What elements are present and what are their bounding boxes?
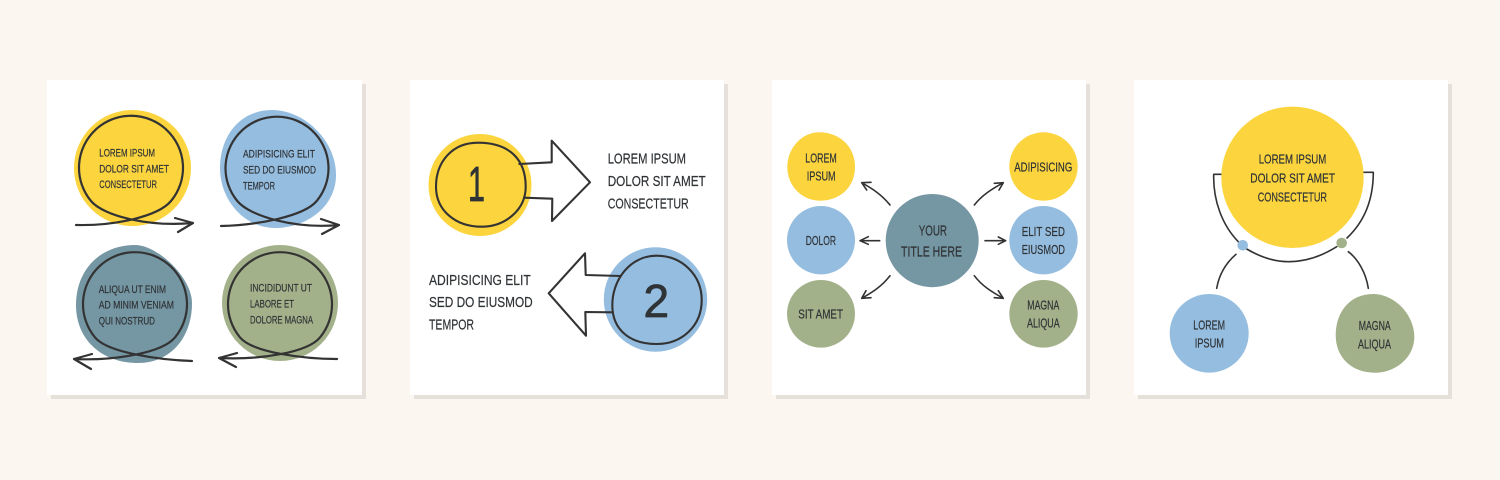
text: step 2: TEMPOR (429, 317, 474, 333)
step: blue loop: ADIPISICING ELIT (243, 148, 315, 160)
node: dolor: DOLOR (806, 234, 836, 248)
text: step 1: LOREM IPSUM (608, 151, 686, 167)
text: step 2 (429, 273, 533, 333)
step: yellow loop: LOREM IPSUM (99, 148, 155, 160)
arrow: lower right (974, 276, 1003, 298)
node: sit amet: SIT AMET (798, 308, 843, 322)
node: lorem ipsum (787, 132, 855, 201)
node: blue lorem ipsum (1170, 294, 1249, 373)
center node: YOUR (919, 224, 947, 240)
step: yellow loop (74, 110, 193, 232)
panel: hierarchy (1134, 80, 1452, 399)
node: lorem ipsum: LOREM (805, 151, 837, 165)
step: yellow loop: CONSECTETUR (99, 179, 157, 191)
connector left (1217, 254, 1236, 288)
main yellow circle: LOREM IPSUM (1259, 152, 1326, 166)
step: teal loop: QUI NOSTRUD (99, 315, 155, 327)
step 1: yellow circle with arrow: 1 (468, 158, 485, 212)
arrow: left (860, 237, 880, 244)
text: step 2: SED DO EIUSMOD (429, 295, 533, 311)
arrow: upper left (862, 182, 890, 205)
node: green magna aliqua (1336, 294, 1414, 373)
node: elit sed eiusmod: ELIT SED (1022, 225, 1065, 239)
panel: four looped arrows (47, 80, 366, 399)
step 2: blue circle with arrow (549, 247, 707, 352)
node: magna aliqua (1009, 280, 1078, 348)
main yellow circle: DOLOR SIT AMET (1250, 171, 1335, 185)
node: elit sed eiusmod (1009, 206, 1078, 274)
step 1: yellow circle with arrow (428, 134, 590, 236)
panel: numbered arrows (410, 80, 728, 399)
center node: TITLE HERE (901, 245, 962, 261)
arc bracket with dots (1214, 172, 1373, 262)
node: magna aliqua: MAGNA (1027, 299, 1060, 313)
panel: mind map (772, 80, 1090, 399)
step: teal loop: AD MINIM VENIAM (99, 299, 174, 311)
step: green loop (219, 245, 338, 367)
step: yellow loop: DOLOR SIT AMET (99, 163, 169, 175)
node: blue lorem ipsum: LOREM (1193, 318, 1225, 332)
main yellow circle: CONSECTETUR (1258, 190, 1327, 204)
node: green magna aliqua: ALIQUA (1358, 337, 1391, 351)
node: dolor (787, 206, 855, 274)
text: step 1: DOLOR SIT AMET (608, 174, 706, 190)
step: green loop: INCIDIDUNT UT (250, 283, 312, 295)
node: blue lorem ipsum: IPSUM (1195, 337, 1224, 351)
node: green magna aliqua: MAGNA (1359, 319, 1391, 333)
text: step 2: ADIPISICING ELIT (429, 273, 531, 289)
text: step 1 (608, 151, 706, 212)
step: teal loop: ALIQUA UT ENIM (99, 284, 166, 296)
step: blue loop: SED DO EIUSMOD (243, 164, 316, 176)
node: elit sed eiusmod: EIUSMOD (1022, 243, 1065, 257)
node: magna aliqua: ALIQUA (1027, 317, 1060, 331)
node: lorem ipsum: IPSUM (807, 169, 836, 183)
center node (886, 194, 979, 287)
step 2: blue circle with arrow: 2 (644, 275, 669, 327)
step: green loop: DOLORE MAGNA (250, 314, 313, 326)
arrow: lower left (862, 276, 890, 298)
text: step 1: CONSECTETUR (608, 196, 689, 212)
step: teal loop (74, 245, 192, 369)
connector right (1348, 252, 1368, 288)
arrow: upper right (974, 183, 1003, 205)
step: blue loop (220, 110, 339, 234)
arrow: right (985, 237, 1006, 244)
node: adipisicing (1009, 132, 1078, 201)
main yellow circle (1221, 107, 1364, 248)
step: green loop: LABORE ET (250, 298, 294, 310)
step: blue loop: TEMPOR (243, 180, 275, 192)
node: sit amet (787, 280, 855, 348)
node: adipisicing: ADIPISICING (1014, 160, 1072, 174)
